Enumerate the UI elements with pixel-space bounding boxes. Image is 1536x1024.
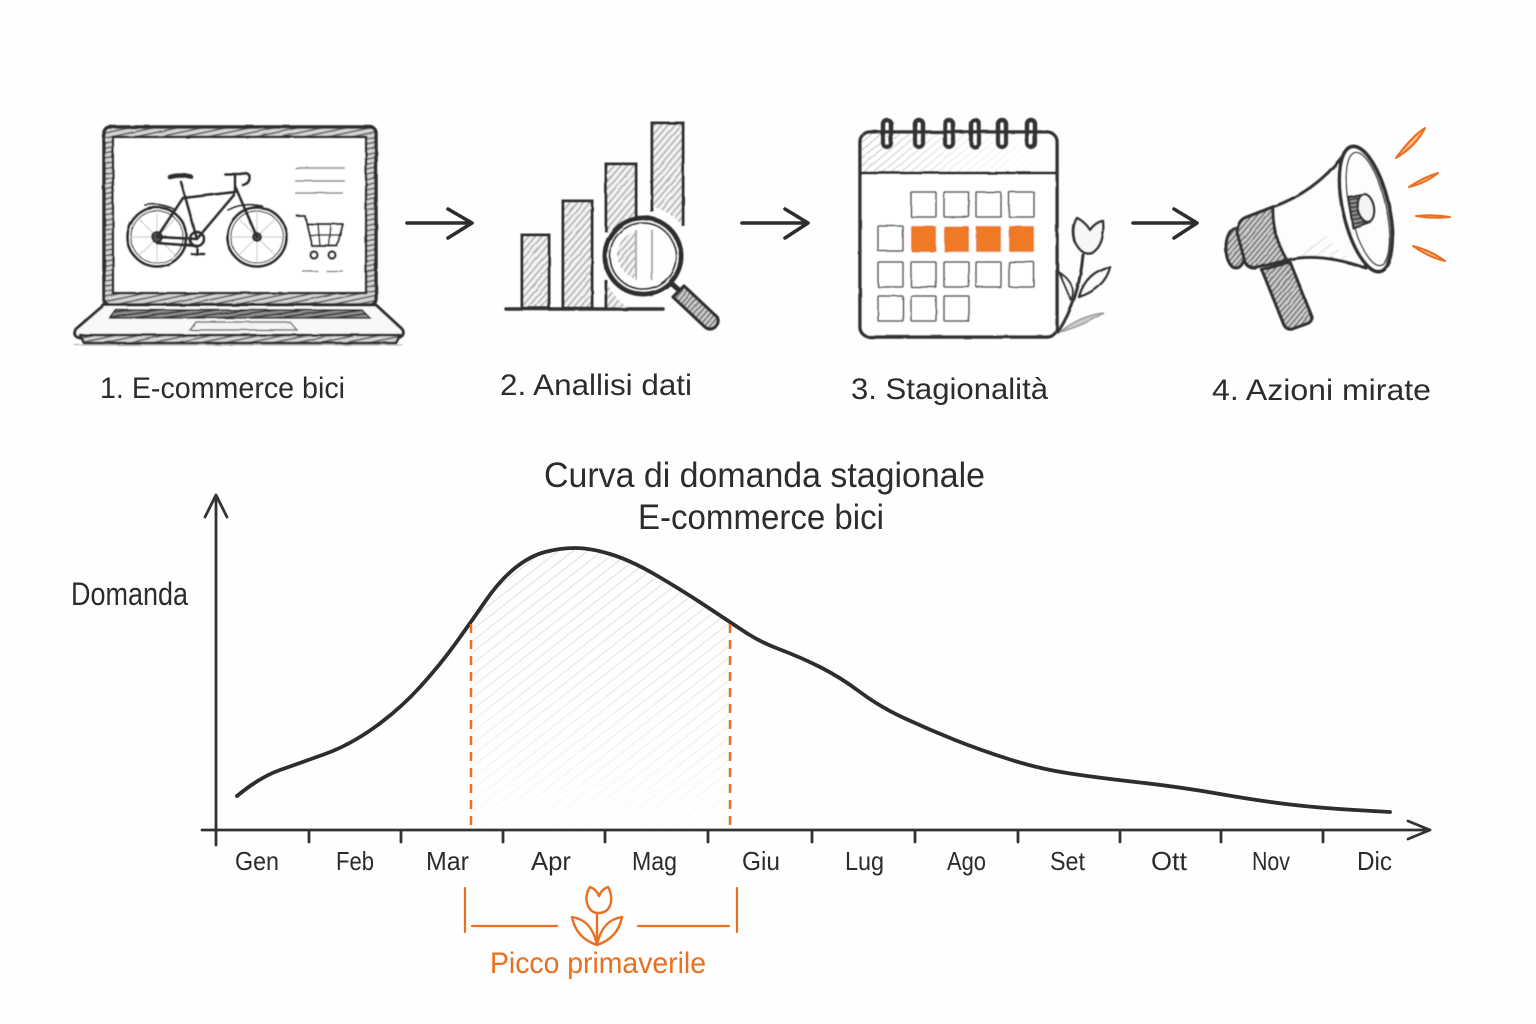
page text lines [295, 168, 345, 271]
month labels: Ott [1151, 846, 1188, 876]
month labels: Mag [632, 846, 677, 876]
icon: calendar with tulip [860, 120, 1110, 337]
month labels: Nov [1252, 846, 1290, 876]
highlighted spring days [911, 226, 1034, 252]
chart title: E-commerce bici [638, 498, 884, 537]
month labels: Dic [1357, 846, 1392, 876]
icon: laptop with bike and cart [74, 127, 403, 345]
panel: step 2 data analysis [500, 123, 718, 402]
y axis [205, 495, 227, 845]
month labels: Set [1050, 846, 1086, 876]
month labels [235, 846, 1392, 876]
label: step 2: 2. Anallisi dati [500, 369, 692, 402]
calendar day cells [878, 192, 1034, 321]
panel: step 3 seasonality [851, 120, 1110, 406]
shaded peak area [471, 550, 730, 794]
y axis label: Domanda [71, 576, 188, 612]
callout: spring peak [465, 887, 737, 980]
arrow: step 3 to 4 [1133, 209, 1197, 238]
month labels: Ago [947, 846, 986, 876]
icon: magnifying glass [605, 218, 718, 329]
month labels: Apr [531, 846, 571, 876]
icon: orange sound rays [1396, 128, 1450, 261]
chart title: Curva di domanda stagionale [544, 456, 985, 495]
month labels: Gen [235, 846, 279, 876]
icon: tulip [1058, 218, 1110, 332]
month labels: Lug [845, 846, 884, 876]
arrow: step 1 to 2 [407, 209, 472, 238]
icon: shopping cart [296, 216, 343, 258]
label: step 4: 4. Azioni mirate [1212, 374, 1431, 407]
month labels: Mar [426, 846, 469, 876]
panel: step 1 e-commerce [74, 127, 403, 405]
icon: orange tulip [572, 887, 622, 945]
chart: seasonal demand curve [71, 495, 1430, 876]
peak boundaries [471, 624, 730, 830]
icon: bar chart with magnifier [506, 123, 718, 329]
label: step 3: 3. Stagionalità [851, 373, 1048, 406]
month labels: Feb [336, 846, 374, 876]
arrow: step 2 to 3 [742, 209, 808, 238]
calendar rings [883, 120, 1035, 147]
bracket [465, 888, 737, 932]
month labels: Giu [742, 846, 780, 876]
chart title [544, 456, 985, 537]
icon: megaphone [1226, 141, 1403, 329]
x axis with ticks [202, 821, 1430, 842]
demand curve [237, 548, 1390, 812]
label: step 1: 1. E-commerce bici [100, 372, 345, 405]
icon: bicycle [128, 174, 286, 266]
callout label: Picco primaverile [490, 947, 706, 980]
panel: step 4 targeted actions [1212, 128, 1450, 407]
